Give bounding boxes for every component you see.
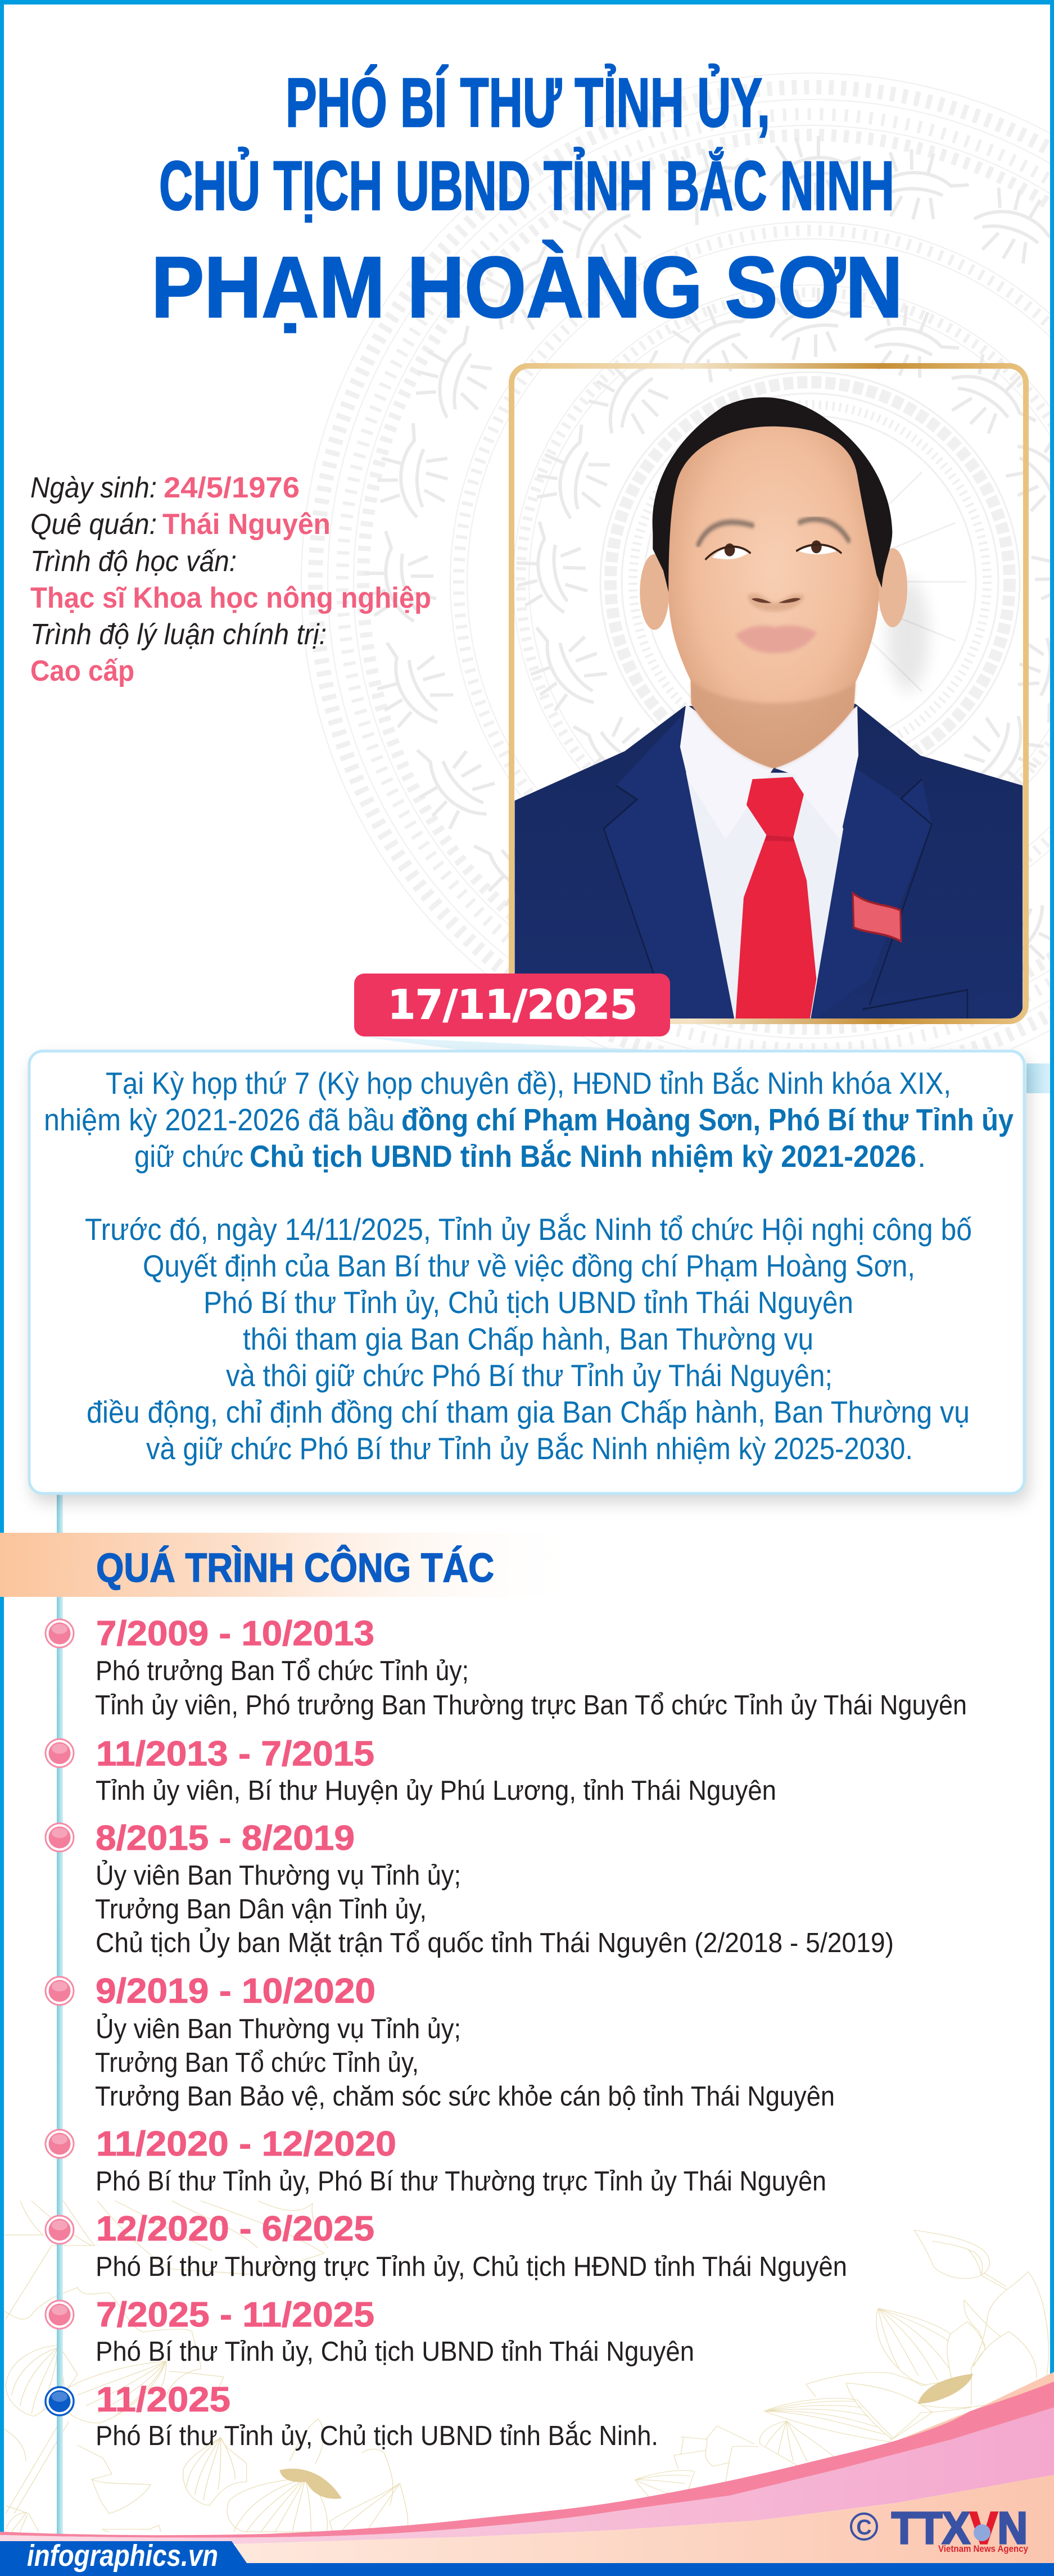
timeline entry 2015-2019: Trưởng Ban Dân vận Tỉnh ủy, (95, 1894, 427, 1925)
timeline entry 2020-2025: Phó Bí thư Thường trực Tỉnh ủy, Chủ tịch HĐND tỉnh Thái Nguyên (96, 2252, 847, 2282)
timeline entry 2015-2019: 8/2015 - 8/2019 (96, 1819, 355, 1858)
announcement text: và giữ chức Phó Bí thư Tỉnh ủy Bắc Ninh nhiệm kỳ 2025-2030. (146, 1431, 913, 1466)
timeline entry 2013-2015: 11/2013 - 7/2015 (96, 1735, 374, 1773)
personal information: Trình độ lý luận chính trị: (30, 618, 327, 651)
background: lotus line art bottom right (635, 2230, 1048, 2497)
background: bronze drum pattern (301, 73, 1054, 1090)
timeline entry 2025: Phó Bí thư Tỉnh ủy, Chủ tịch UBND tỉnh Thái Nguyên (96, 2337, 694, 2367)
personal information: Quê quán: (30, 508, 157, 541)
announcement text: điều động, chỉ định đồng chí tham gia Ban Chấp hành, Ban Thường vụ (87, 1395, 970, 1429)
background: lotus line art bottom left (0, 2201, 408, 2532)
announcement text: Chủ tịch UBND tỉnh Bắc Ninh nhiệm kỳ 2021-2026 (250, 1139, 916, 1174)
portrait photo (512, 366, 1026, 1022)
timeline entry 2015-2019: Chủ tịch Ủy ban Mặt trận Tổ quốc tỉnh Thái Nguyên (2/2018 - 5/2019) (96, 1927, 894, 1958)
announcement text: Phó Bí thư Tỉnh ủy, Chủ tịch UBND tỉnh Thái Nguyên (203, 1285, 853, 1320)
website tab: infographics.vn (27, 2539, 218, 2573)
date badge (354, 974, 670, 1050)
timeline entry 2025: 7/2025 - 11/2025 (96, 2296, 374, 2334)
announcement text: và thôi giữ chức Phó Bí thư Tỉnh ủy Thái Nguyên; (226, 1358, 833, 1393)
timeline entry 2009-2013: Phó trưởng Ban Tổ chức Tỉnh ủy; (96, 1656, 469, 1686)
personal information: Trình độ học vấn: (30, 545, 237, 578)
footer swoosh (0, 2372, 1054, 2576)
TTXVN logo: Vietnam News Agency (938, 2543, 1028, 2554)
personal information: Cao cấp (30, 655, 134, 687)
announcement text: thôi tham gia Ban Chấp hành, Ban Thường vụ (243, 1321, 813, 1356)
timeline entry 2020-2025: 12/2020 - 6/2025 (96, 2210, 374, 2248)
timeline entry 2009-2013 (46, 1614, 967, 1721)
timeline entry 2009-2013: Tỉnh ủy viên, Phó trưởng Ban Thường trực Ban Tổ chức Tỉnh ủy Thái Nguyên (95, 1690, 967, 1721)
timeline entry 2009-2013: 7/2009 - 10/2013 (96, 1614, 374, 1653)
panel tab (1026, 1063, 1050, 1093)
date badge: 17/11/2025 (388, 981, 637, 1028)
timeline entry 2013-2015 (46, 1735, 776, 1806)
title (151, 65, 903, 336)
announcement text: Trước đó, ngày 14/11/2025, Tỉnh ủy Bắc Ninh tổ chức Hội nghị công bố (85, 1212, 972, 1247)
announcement text: . (917, 1139, 926, 1174)
timeline entry 2019-2020: Trưởng Ban Bảo vệ, chăm sóc sức khỏe cán bộ tỉnh Thái Nguyên (95, 2081, 835, 2112)
announcement text (44, 1066, 1014, 1466)
timeline entry 11/2025 current: Phó Bí thư Tỉnh ủy, Chủ tịch UBND tỉnh Bắc Ninh. (96, 2421, 658, 2451)
timeline entry 2020-2025 (46, 2210, 847, 2282)
personal information (30, 472, 431, 687)
timeline entry 2020: 11/2020 - 12/2020 (96, 2125, 396, 2163)
timeline entry 2019-2020: 9/2019 - 10/2020 (96, 1972, 376, 2011)
section heading: work history: QUÁ TRÌNH CÔNG TÁC (96, 1545, 494, 1591)
timeline entry 2019-2020 (46, 1972, 835, 2112)
timeline entry 2013-2015: Tỉnh ủy viên, Bí thư Huyện ủy Phú Lương, tỉnh Thái Nguyên (96, 1776, 776, 1806)
timeline entry 2020 (46, 2125, 826, 2197)
timeline entry 2015-2019: Ủy viên Ban Thường vụ Tỉnh ủy; (96, 1860, 461, 1891)
timeline entry 11/2025 current: 11/2025 (96, 2380, 230, 2419)
personal information: Thạc sĩ Khoa học nông nghiệp (30, 582, 431, 614)
timeline vertical line (57, 1492, 63, 2541)
timeline entry 11/2025 current (46, 2380, 658, 2451)
timeline entry 2020: Phó Bí thư Tỉnh ủy, Phó Bí thư Thường trực Tỉnh ủy Thái Nguyên (96, 2166, 826, 2197)
title: PHÓ BÍ THƯ TỈNH ỦY, (286, 65, 770, 142)
timeline entry 2025 (46, 2296, 694, 2367)
personal information: 24/5/1976 (164, 472, 300, 504)
timeline entry 2019-2020: Trưởng Ban Tổ chức Tỉnh ủy, (95, 2048, 419, 2078)
panel: announcement (29, 1051, 1024, 1493)
timeline entry 2015-2019 (46, 1819, 894, 1958)
title: PHẠM HOÀNG SƠN (151, 239, 903, 336)
section heading: work history (0, 1533, 585, 1597)
announcement text: nhiệm kỳ 2021-2026 đã bầu (44, 1102, 395, 1137)
announcement text: Tại Kỳ họp thứ 7 (Kỳ họp chuyên đề), HĐND tỉnh Bắc Ninh khóa XIX, (106, 1066, 951, 1101)
personal information: Thái Nguyên (162, 508, 331, 541)
TTXVN logo: C (856, 2516, 872, 2539)
announcement text: giữ chức (134, 1139, 243, 1174)
timeline entry 2019-2020: Ủy viên Ban Thường vụ Tỉnh ủy; (96, 2013, 461, 2044)
personal information: Ngày sinh: (30, 472, 157, 504)
announcement text: Quyết định của Ban Bí thư về việc đồng chí Phạm Hoàng Sơn, (143, 1248, 915, 1283)
TTXVN logo: TTXVN (892, 2503, 1028, 2553)
